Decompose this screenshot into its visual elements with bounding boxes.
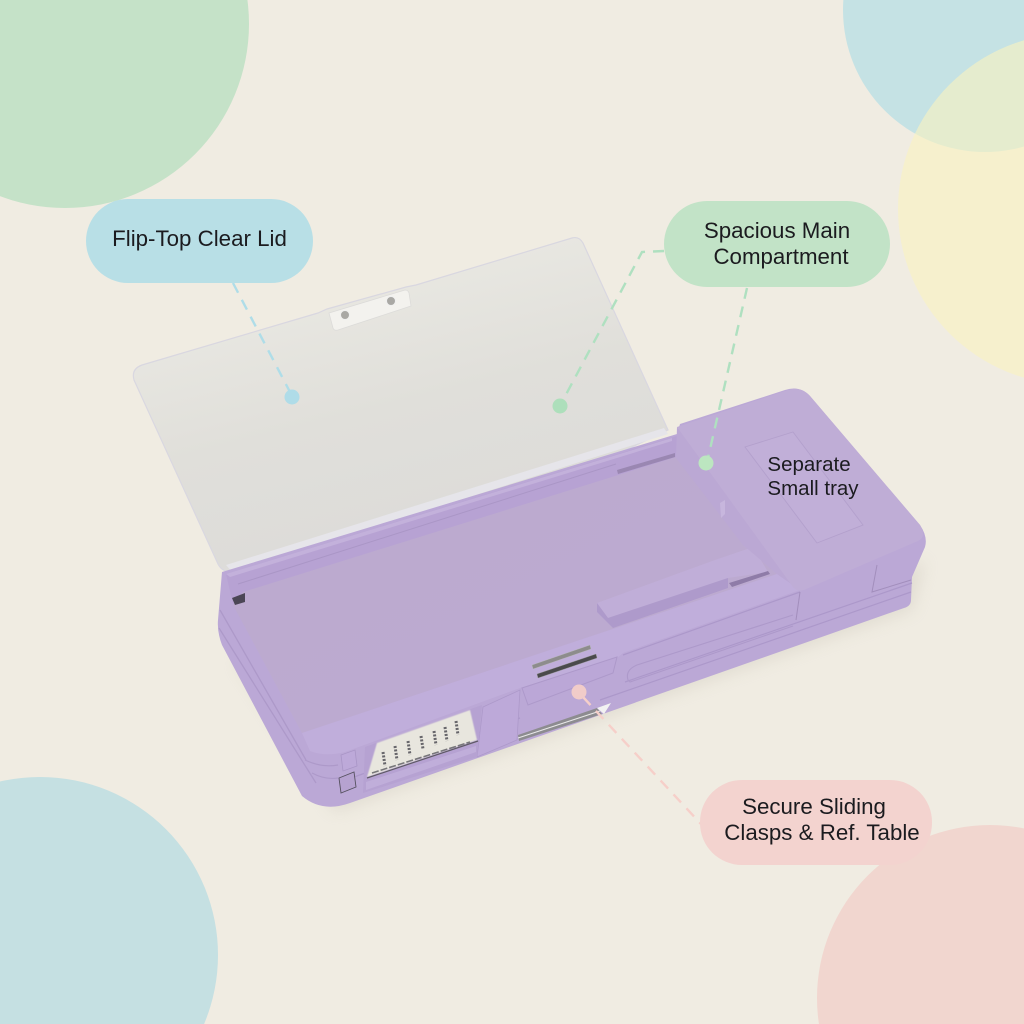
back wall of compartment	[226, 436, 677, 604]
corner hole	[232, 593, 245, 605]
lid metal clip	[329, 290, 411, 330]
pen rest bar	[597, 547, 770, 628]
rim highlight	[226, 438, 672, 577]
clasp housing	[477, 690, 520, 757]
callout: spacious main compartment: Compartment	[713, 244, 849, 269]
callout: secure sliding clasps and reference table	[572, 684, 932, 865]
sliding clasp metal bars	[532, 645, 597, 678]
front corner ribs	[305, 760, 338, 778]
side seam	[796, 565, 911, 620]
small tray inner wall	[676, 427, 800, 590]
case body silhouette	[218, 388, 926, 807]
callout: spacious main compartment	[552, 201, 890, 470]
decorative circle: green top left	[0, 0, 249, 208]
callout: flip-top clear lid	[86, 199, 313, 404]
decorative circle: yellow right	[898, 33, 1024, 385]
lid hinge strip	[226, 428, 668, 572]
small tray recessed panel	[745, 432, 863, 543]
callout: separate small tray: Separate	[767, 453, 851, 476]
decorative circle: blue top right	[843, 0, 1024, 152]
lower clasp	[518, 703, 611, 741]
left side ribs	[219, 610, 316, 783]
floor of main compartment	[233, 457, 777, 733]
front slot outline	[627, 615, 793, 682]
callout: separate small tray: Small tray	[767, 477, 859, 500]
front face ridges	[340, 583, 912, 782]
back wall line	[238, 464, 616, 584]
small tray tab	[720, 500, 725, 518]
clear lid	[133, 238, 668, 572]
decorative circle: pink bottom right	[817, 825, 1024, 1024]
pencil case	[218, 388, 926, 807]
back wall ledge notch	[617, 453, 675, 474]
reference table window	[363, 705, 482, 793]
small side switches	[339, 750, 357, 793]
callout: flip-top clear lid: Flip-Top Clear Lid	[112, 226, 287, 251]
front clasp slide recess	[522, 657, 617, 705]
front rim	[302, 574, 800, 754]
case shadow	[235, 560, 925, 812]
callout: spacious main compartment: Spacious Main	[704, 218, 850, 243]
callout: secure sliding clasps and reference table: Clasps & Ref. Table	[724, 820, 920, 845]
small tray lid	[677, 389, 923, 591]
callout: separate small tray	[767, 453, 859, 500]
decorative circle: blue bottom left	[0, 777, 218, 1024]
callout: secure sliding clasps and reference table: Secure Sliding	[742, 794, 886, 819]
